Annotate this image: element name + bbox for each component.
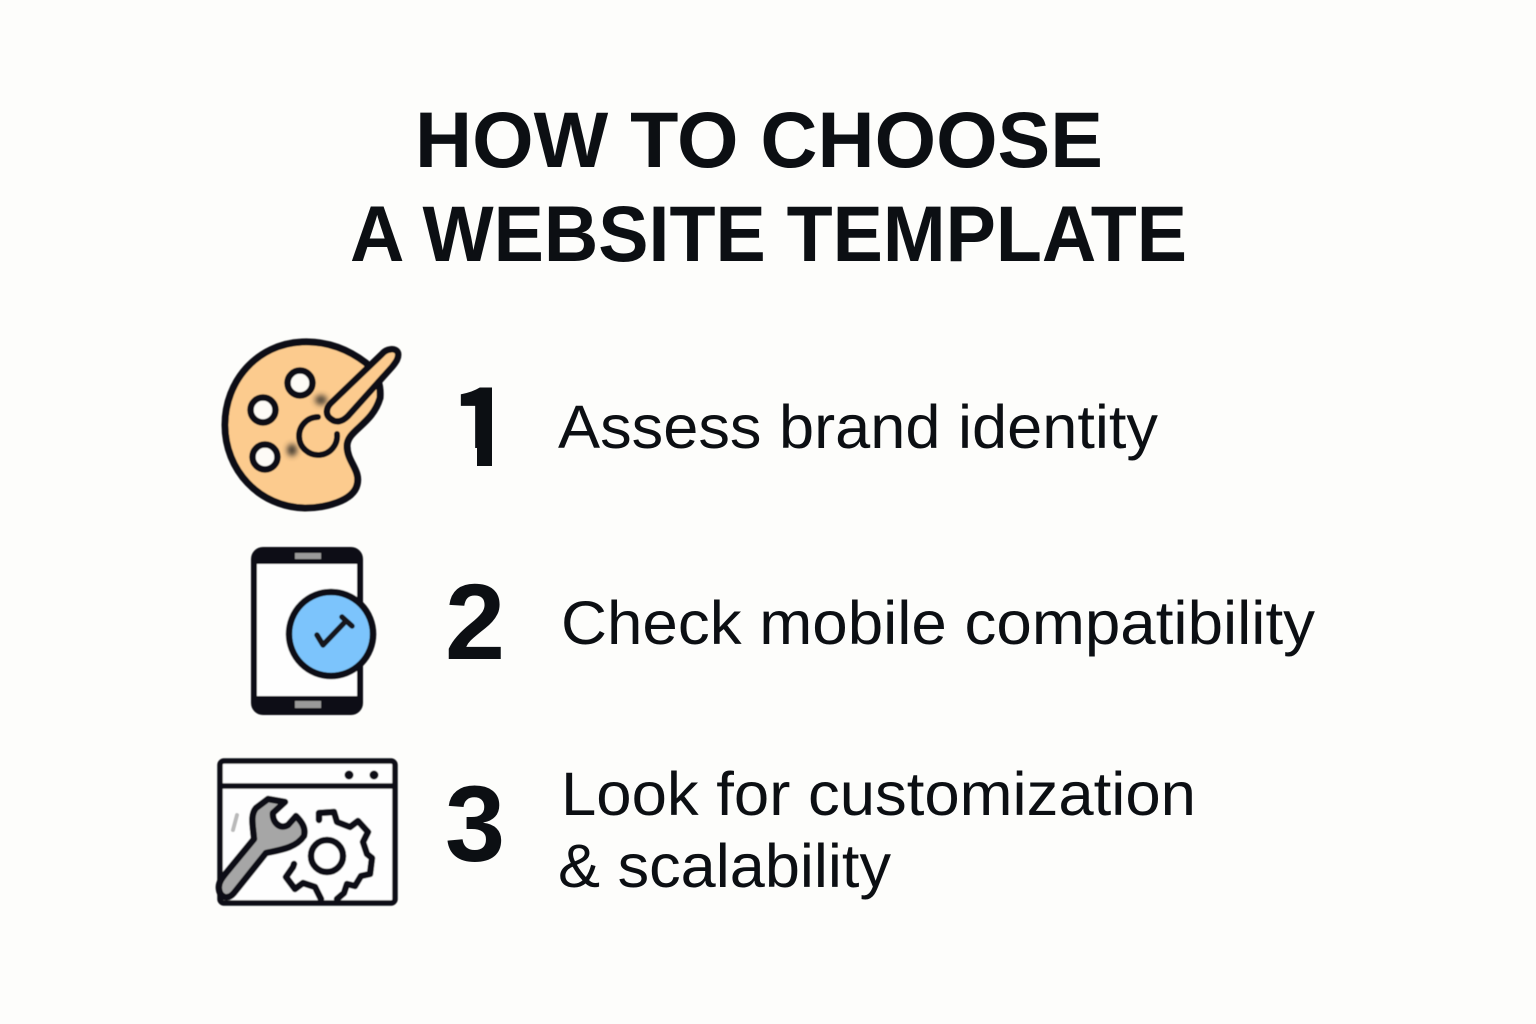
step 3 number: 3 (445, 763, 505, 884)
icon: browser window with wrench and gear (219, 761, 395, 903)
step 2 label: Check mobile compatibility (561, 589, 1316, 657)
step 2 number: 2 (445, 561, 505, 682)
step 3 label (558, 760, 1196, 900)
title: A WEBSITE TEMPLATE (350, 189, 1187, 278)
step 1 label: Assess brand identity (558, 393, 1159, 461)
icon: paint palette (225, 342, 398, 508)
icon: phone with check badge (251, 547, 373, 715)
step 3 label: & scalability (558, 832, 892, 900)
step 3 label: Look for customization (561, 760, 1196, 828)
title: HOW TO CHOOSE (415, 95, 1103, 184)
title (350, 95, 1187, 278)
step 1 number: 1 (450, 342, 513, 496)
